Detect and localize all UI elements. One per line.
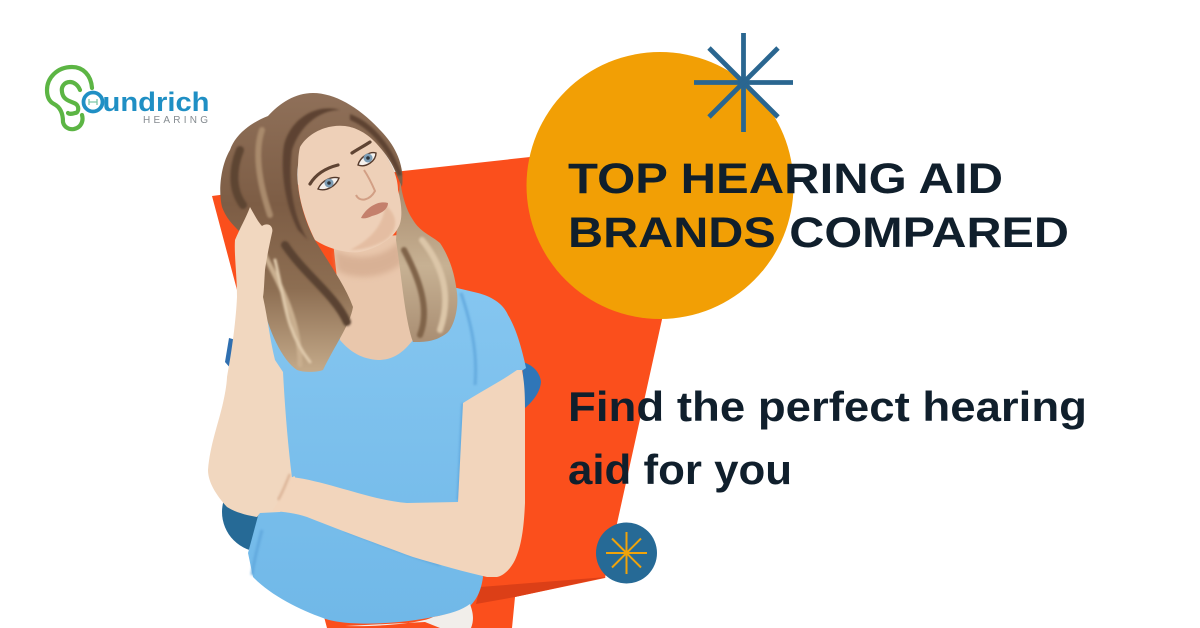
forearm shadow line: [278, 474, 290, 500]
blue circle behind elbow: [222, 472, 302, 552]
orange angular shape: [212, 138, 702, 628]
face: [298, 126, 401, 252]
logo subtitle: HEARING: [143, 115, 208, 126]
crossed forearm: [272, 370, 525, 577]
hair shadow along face: [283, 108, 402, 240]
shirt shading folds: [252, 293, 476, 575]
torn white edge: [345, 604, 473, 628]
eyebrows: [310, 142, 370, 184]
logo o ring: [84, 92, 102, 112]
logo wordmark: undrich: [102, 87, 210, 117]
left and top hair: [220, 93, 403, 372]
dark fold shadow: [476, 577, 607, 604]
person: thinking woman: [208, 93, 541, 628]
heading: BRANDS COMPARED: [568, 209, 1069, 257]
blue shirt sliver at left: [225, 338, 236, 370]
small blue badge with yellow asterisk: [596, 522, 657, 584]
heading: TOP HEARING AID: [568, 155, 1003, 203]
neck shadow: [335, 240, 403, 277]
yellow circle: [526, 52, 794, 319]
nose: [356, 170, 375, 200]
eye left: [318, 177, 339, 190]
neck: [333, 235, 413, 360]
subheading: [568, 383, 1087, 493]
raised arm and hand: [208, 207, 295, 517]
icon: green ear: [47, 67, 92, 129]
icon: large blue asterisk: [694, 33, 793, 132]
subheading: aid for you: [568, 446, 792, 493]
heading: [568, 155, 1069, 257]
cheek shading: [350, 205, 395, 250]
hair strands: [234, 130, 445, 365]
eye right: [358, 153, 376, 166]
dark sleeve fold: [522, 362, 541, 408]
shirt: [248, 285, 526, 624]
subheading: Find the perfect hearing: [568, 383, 1087, 430]
lips: [361, 202, 388, 218]
logo: Soundrich Hearing: [47, 67, 210, 129]
right lower hair: [396, 180, 457, 342]
